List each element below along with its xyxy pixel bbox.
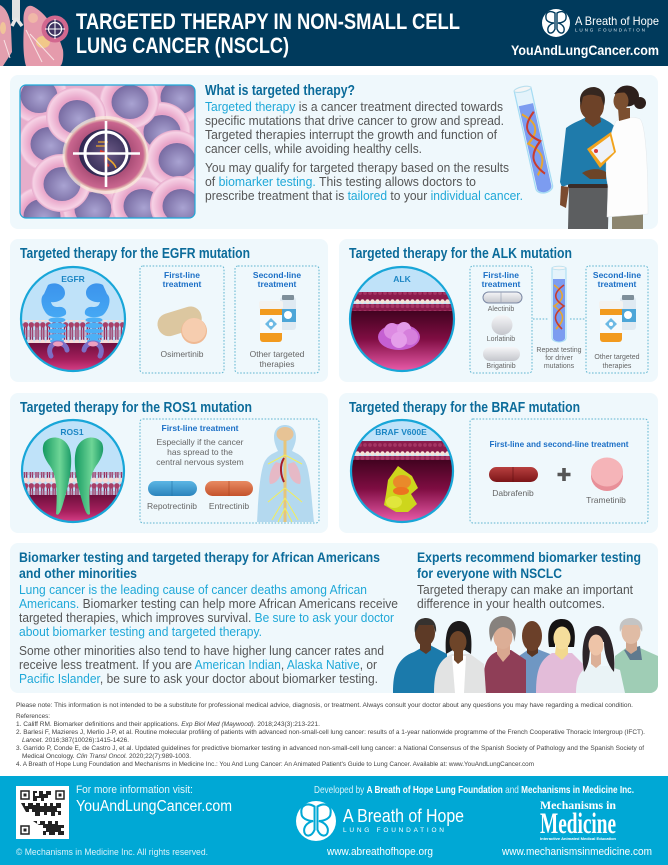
url: mechanismsinmedicine.com: www.mechanismsinmedicine.com — [501, 846, 652, 858]
text: more information: YouAndLungCancer.com — [76, 798, 232, 815]
icon: test tube for repeat testing — [552, 266, 566, 342]
box: first-line treatment — [140, 266, 224, 373]
text: more information — [76, 784, 232, 815]
connector lines — [533, 318, 586, 320]
box: first-line treatment — [140, 419, 319, 523]
panel: biomarker testing and minorities — [10, 543, 658, 693]
box: first-line treatment: Brigatinib — [486, 363, 516, 370]
disclaimer note: Please note: This information is not intended to be a substitute for professional medical advice, diagnosis, or treatment. Always consult your doctor about any questions you may have regarding a medical condition. — [16, 702, 633, 709]
text: African Americans: Lung cancer is the leading cause of cancer deaths among African — [19, 582, 367, 597]
box: first-line treatment: Lorlatinib — [487, 336, 515, 343]
illustration: group of diverse people — [393, 616, 658, 693]
copyright: © Mechanisms in Medicine Inc. All rights reserved. — [16, 847, 208, 858]
QR code — [16, 786, 69, 839]
logo: A Breath of Hope Lung Foundation: A Breath of Hope — [343, 806, 464, 826]
heading: Targeted therapy for the ROS1 mutation — [20, 400, 252, 416]
title: TARGETED THERAPY IN NON-SMALL CELL — [76, 9, 460, 34]
logo: Mechanisms in Medicine: Mechanisms in — [540, 800, 617, 812]
text: biomarker testing qualification: You may qualify for targeted therapy based on the results — [205, 160, 509, 175]
panel: ALK mutation — [339, 239, 658, 382]
box: first-line treatment: First-line — [164, 270, 200, 280]
references: 2. Barlesi F, Mazieres J, Merlio J-P, et al. Routine molecular profiling of patients with advanced non-small-cell lung cancer: results of a 1-year nationwide programme of the French Cooperative Thoracic Intergroup (IFCT). — [16, 729, 645, 736]
text: CNS note: Especially if the cancer — [157, 437, 244, 447]
icon: medicine bottles — [259, 295, 296, 342]
text: biomarker testing qualification: of biomarker testing. This testing allows doctors to — [205, 174, 476, 189]
illustration: ROS1 receptor: ROS1 — [60, 427, 84, 437]
heading: African Americans and other minorities: Biomarker testing and targeted therapy for African Americans — [19, 549, 380, 565]
references: 3. Garrido P, Conde E, de Castro J, et al. Updated guidelines for predictive biomarker testing in advanced non-small-cell lung cancer: a National Consensus of the Spanish Society of Pathology and the Spanish Society of — [16, 745, 644, 752]
text: definition — [205, 99, 504, 156]
text: experts: difference in your health outcomes. — [417, 596, 605, 611]
panel: what is targeted therapy — [10, 75, 658, 229]
box: second-line treatment: Other targeted — [250, 349, 305, 359]
box: second-line treatment — [586, 266, 648, 373]
text: African Americans: Americans. Biomarker testing can help more African Americans receive — [19, 596, 398, 611]
heading: African Americans and other minorities — [19, 549, 380, 581]
icon: osimertinib tablets — [155, 304, 207, 344]
box: second-line treatment: therapies — [603, 363, 632, 370]
illustration: patient and doctor — [560, 86, 648, 229]
box: first-line and second-line treatment: Trametinib — [586, 495, 626, 505]
icon: lorlatinib tablet — [492, 315, 512, 335]
icon: medicine bottles — [599, 295, 636, 342]
references: Medical Oncology. Clin Transl Oncol. 2020;22(7):989-1003. — [22, 753, 191, 760]
illustration: ALK protein — [349, 265, 455, 373]
logo: Mechanisms in Medicine — [540, 800, 617, 841]
box: first-line treatment: First-line — [483, 270, 519, 280]
logo: A Breath of Hope: LUNG FOUNDATION — [575, 28, 645, 32]
box: second-line treatment: Second-line — [253, 270, 301, 280]
illustration: targeted cancer cell among healthy cells — [19, 84, 196, 219]
box: first-line treatment: Alectinib — [488, 306, 514, 313]
heading: Targeted therapy for the BRAF mutation — [349, 400, 580, 416]
text: more information: For more information visit: — [76, 784, 193, 796]
text: African Americans — [19, 582, 398, 639]
text: CNS note: central nervous system — [156, 457, 244, 467]
text: repeat testing: mutations — [544, 363, 575, 370]
references: References: — [16, 713, 50, 720]
title: LUNG CANCER (NSCLC) — [76, 33, 289, 58]
illustration: body with nervous system — [257, 425, 314, 522]
box: second-line treatment: Second-line — [593, 270, 641, 280]
heading: What is targeted therapy? — [205, 83, 355, 99]
text: repeat testing: Repeat testing — [536, 347, 582, 354]
illustration: EGFR receptor: EGFR — [61, 274, 85, 284]
heading: Targeted therapy for the ALK mutation — [349, 246, 572, 262]
illustration: EGFR receptor — [20, 265, 126, 373]
icon: trametinib tablet — [591, 458, 623, 491]
box: first-line and second-line treatment: First-line and second-line treatment — [490, 439, 629, 449]
text: definition: specific mutations that drive cancer to grow and spread. — [205, 113, 504, 128]
references: 4. A Breath of Hope Lung Foundation and Mechanisms in Medicine Inc.: You And Lung Cancer: An Animated Patient's Guide to Lung Cancer. Available at: www.YouAndLungCancer.com — [16, 761, 534, 768]
panel: EGFR mutation — [10, 239, 328, 382]
logo: A Breath of Hope: A Breath of Hope — [575, 14, 659, 28]
text: definition: Targeted therapy is a cancer treatment directed towards — [205, 99, 503, 114]
box: first-line treatment: Entrectinib — [209, 501, 249, 511]
icon: brigatinib tablet — [483, 347, 520, 361]
box: first-line treatment: First-line treatment — [162, 423, 239, 433]
box: first-line treatment: Repotrectinib — [147, 501, 197, 511]
references: 1. Califf RM. Biomarker definitions and their applications. Exp Biol Med (Maywood). 2018;243(3):213-221. — [16, 721, 320, 728]
box: first-line and second-line treatment — [470, 419, 648, 523]
logo: Mechanisms in Medicine: Medicine — [540, 807, 616, 840]
icon: plus sign — [558, 468, 570, 481]
box: second-line treatment: Other targeted — [594, 354, 640, 361]
text: biomarker testing qualification — [205, 160, 523, 203]
box: first-line treatment: treatment — [482, 279, 521, 289]
text: definition: Targeted therapies interrupt the growth and function of — [205, 127, 497, 142]
heading: experts recommend — [417, 549, 641, 581]
text: definition: cancer cells, while avoiding healthy cells. — [205, 141, 422, 156]
title — [76, 9, 460, 58]
references: Lancet. 2016;387(10026):1415-1426. — [22, 737, 129, 744]
heading: experts recommend: Experts recommend biomarker testing — [417, 549, 641, 565]
illustration: ALK protein: ALK — [393, 274, 412, 284]
icon: dabrafenib capsule — [489, 467, 538, 482]
icon: repotrectinib capsule — [148, 481, 197, 496]
text: CNS note — [156, 437, 244, 467]
text: repeat testing: for driver — [545, 355, 573, 362]
header banner — [0, 0, 668, 66]
icon: entrectinib capsule — [205, 481, 253, 496]
logo: Mechanisms in Medicine: Interactive Animated Medical Education — [540, 837, 616, 841]
text: African Americans: about biomarker testing and targeted therapy. — [19, 624, 262, 639]
icon: alectinib capsule — [483, 292, 522, 303]
heading: experts recommend: for everyone with NSCLC — [417, 565, 562, 581]
box: first-line treatment: Osimertinib — [161, 349, 204, 359]
text: experts: Targeted therapy can make an important — [417, 582, 633, 597]
icon: lungs with target cell — [0, 0, 68, 66]
url: abreathofhope.org: www.abreathofhope.org — [326, 846, 433, 858]
icon: test tube with DNA — [514, 85, 554, 195]
illustration: ROS1 receptor — [20, 418, 126, 524]
logo: A Breath of Hope Lung Foundation — [296, 801, 464, 841]
text: biomarker testing qualification: prescribe treatment that is tailored to your individual cancer. — [205, 188, 523, 203]
text: other minorities — [19, 643, 384, 686]
box: second-line treatment — [235, 266, 319, 373]
references — [16, 713, 645, 768]
illustration: BRAF V600E protein: BRAF V600E — [375, 427, 427, 437]
box: second-line treatment: treatment — [598, 279, 637, 289]
text: CNS note: has spread to the — [167, 447, 233, 457]
box: first-line treatment: treatment — [163, 279, 202, 289]
footer — [0, 776, 668, 865]
box: first-line treatment — [470, 266, 532, 373]
panel: ROS1 mutation — [10, 393, 328, 533]
text: African Americans: targeted therapies, which improves survival. Be sure to ask your doctor — [19, 610, 395, 625]
text: experts — [417, 582, 633, 611]
logo: A Breath of Hope — [542, 9, 659, 37]
text: other minorities: Some other minorities also tend to have higher lung cancer rates and — [19, 643, 384, 658]
text: repeat testing — [536, 347, 582, 370]
text: other minorities: Pacific Islander, be sure to ask your doctor about biomarker testing. — [19, 671, 378, 686]
logo: A Breath of Hope Lung Foundation: LUNG FOUNDATION — [343, 827, 444, 834]
box: second-line treatment: treatment — [258, 279, 297, 289]
heading: African Americans and other minorities: and other minorities — [19, 565, 137, 581]
text: other minorities: receive less treatment. If you are American Indian, Alaska Native, or — [19, 657, 378, 672]
box: second-line treatment: therapies — [260, 359, 294, 369]
developed by: Developed by A Breath of Hope Lung Foundation and Mechanisms in Medicine Inc. — [314, 784, 634, 796]
panel: BRAF mutation — [339, 393, 658, 533]
box: first-line and second-line treatment: Dabrafenib — [492, 488, 534, 498]
heading: Targeted therapy for the EGFR mutation — [20, 246, 250, 262]
illustration: BRAF V600E protein — [349, 418, 455, 524]
